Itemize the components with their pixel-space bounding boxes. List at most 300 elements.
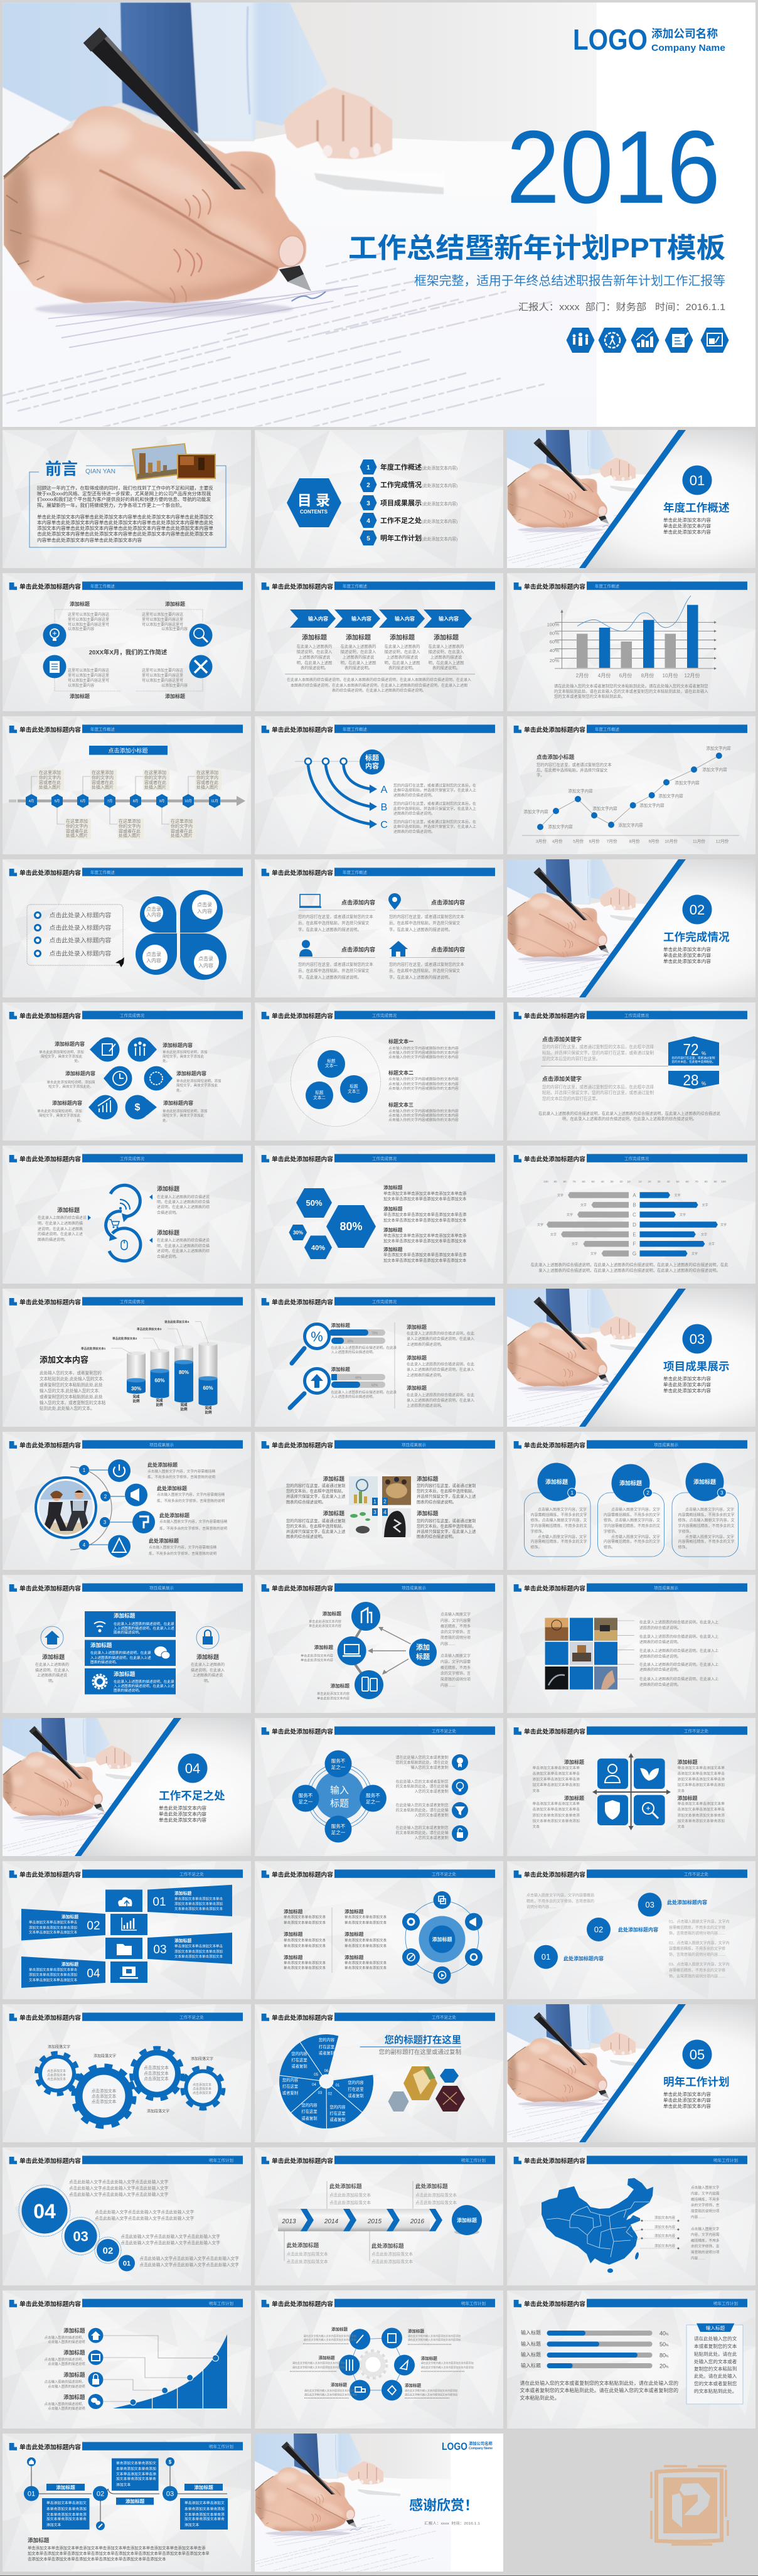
line chart: 7月份 bbox=[607, 839, 617, 844]
notes: 容或者在此 bbox=[39, 780, 61, 785]
left columns: 单击添加文本单击添加文本 bbox=[344, 1960, 387, 1965]
month nodes: 8月 bbox=[133, 799, 138, 803]
text right: 处。 bbox=[163, 1118, 169, 1123]
connectors bbox=[284, 2181, 413, 2261]
right text: 您的文本后，在此框中选择粘贴， bbox=[417, 1488, 476, 1494]
leader lines bbox=[617, 1621, 634, 1679]
mosaic bbox=[545, 1618, 617, 1690]
header: 年度工作概述 bbox=[90, 726, 115, 732]
line chart: 添加文字内容 bbox=[702, 767, 727, 772]
letter text: 您的内容打在这里，或者通过复制您的文本后，在 bbox=[393, 820, 476, 825]
card text: 内容需概括精炼，不用多余的文字 bbox=[678, 1513, 735, 1518]
block 2: 点击添加内容 bbox=[431, 899, 465, 906]
blue row 2: 图表的描述说明。 bbox=[90, 1660, 119, 1665]
blue row 1: 图表的描述说明。 bbox=[114, 1629, 142, 1634]
circles: 文本二 bbox=[313, 1095, 326, 1100]
petals: 入内容 bbox=[146, 911, 161, 918]
line chart: 添加文字内容 bbox=[675, 780, 700, 786]
text left: 简短文字，具体文字添加此 bbox=[39, 1113, 80, 1118]
block 4: 后，在此框中选择粘贴，并选择只保留文 bbox=[389, 968, 461, 973]
text blocks: 合描述说明。 bbox=[157, 1254, 179, 1259]
list: 点击此处录入标题内容 bbox=[49, 949, 111, 958]
text blocks: 明，在此录入上述图表的综合描 bbox=[157, 1199, 210, 1205]
panel: bar chart bbox=[507, 573, 755, 711]
notes: 你的文字内 bbox=[92, 775, 114, 780]
body box 1: 加文本单击添加文本单击 bbox=[46, 2516, 87, 2521]
number circles: 01 bbox=[123, 2260, 131, 2267]
card text: 内容需概括精炼，不用多余的文字 bbox=[531, 1539, 587, 1544]
text blocks: 添加标题 bbox=[157, 1229, 179, 1236]
stat 72%: 您的文本后，在此框中选择粘贴。 bbox=[672, 1060, 715, 1064]
list text: 此处添加标题 bbox=[149, 1538, 179, 1544]
column text: 描述说明，在此录入 bbox=[429, 649, 464, 654]
loop icons bbox=[109, 1199, 130, 1250]
logo: Company Name bbox=[469, 2447, 493, 2450]
right text: 图表的综合描述说明。 bbox=[417, 1533, 456, 1539]
bottom text: 点击此处添加段落文本 bbox=[287, 2258, 328, 2265]
right text: 饰，言简意赅的说明分项内容…… bbox=[669, 1931, 725, 1936]
header: 年度工作概述 bbox=[343, 869, 368, 875]
number circles bbox=[21, 2188, 135, 2271]
gear 1: 点击添加文本 bbox=[47, 2069, 66, 2073]
keyword 1: 您的内容打在这里，或者通过复制您的文本后，在此框中选择 bbox=[542, 1044, 654, 1049]
pie title: 您的副标题打在这里或通过复制 bbox=[379, 2049, 461, 2055]
panel: team photo with list bbox=[3, 1432, 251, 1570]
notes: 容或者在此 bbox=[196, 780, 218, 785]
right text: 内容，文字内容需 bbox=[691, 2232, 720, 2237]
left item: 描述说明，在此录入 bbox=[35, 1668, 69, 1673]
heading: 前言 bbox=[45, 459, 78, 478]
line chart: 5月份 bbox=[573, 839, 584, 844]
text right: 单击此处添加简短说明，添加 bbox=[163, 1108, 208, 1114]
bottom text: 点击此处添加段落文本 bbox=[287, 2251, 328, 2257]
mosaic text: 述图表的综合描述说明。 bbox=[639, 1626, 681, 1631]
column text: 表的描述说明。 bbox=[432, 665, 460, 670]
header: 年度工作概述 bbox=[595, 726, 620, 732]
text block: 内容单击此处添加文本内容单击此处添加文本内容 bbox=[37, 537, 142, 543]
satellites: 足之一 bbox=[331, 1764, 346, 1770]
left text: 单击此处添加文本内容 bbox=[301, 1657, 333, 1662]
right text: 的文本粘贴到此处。请在此处输 bbox=[396, 1808, 449, 1813]
text: 点击输入图表的描述说明， bbox=[45, 2402, 85, 2407]
text blocks: 可以添加主要内容这里可 bbox=[68, 678, 109, 683]
header: 单击此处添加标题内容 bbox=[19, 2014, 81, 2022]
side box: 输入标题 bbox=[706, 2325, 725, 2331]
gear labels: 添加段落文字 bbox=[48, 2044, 70, 2049]
value labels: 文字 bbox=[702, 1203, 708, 1208]
card text: 字修饰。 bbox=[604, 1529, 619, 1534]
card circles bbox=[537, 1462, 726, 1503]
card circles: 添加标题 bbox=[545, 1478, 568, 1485]
text: 单击添加文本单击添加文本单击添加文本单击添 bbox=[383, 1233, 467, 1238]
panel: curved arrows bbox=[255, 716, 503, 854]
text: 添加标题 bbox=[383, 1205, 403, 1211]
chevrons: 输入内容 bbox=[308, 615, 328, 621]
list: 点击此处录入标题内容 bbox=[49, 924, 111, 931]
cylinders: 完成 bbox=[132, 1394, 140, 1399]
top text: 此处添加标题 bbox=[415, 2182, 448, 2189]
band: 2015 bbox=[367, 2218, 382, 2225]
left text bbox=[40, 1355, 106, 1411]
text block bbox=[37, 485, 213, 543]
section number bbox=[178, 1754, 207, 1783]
top text: 此处添加标题 bbox=[329, 2182, 362, 2189]
pie: 或者复制 bbox=[329, 2117, 346, 2122]
right text: 02、点击输入图册文字内容，文字内 bbox=[669, 1941, 730, 1946]
left text: 单击添加文本单击添加文本单 bbox=[532, 1801, 580, 1806]
chart caption: 请在此处输入您的文本或者复制您的文本粘贴到此处。请在此处输入您的文本或者复制您 bbox=[554, 683, 708, 689]
right text: 内容…… bbox=[440, 1641, 456, 1646]
item text: 请在此文字框内输入文本内容添加文本内容添加 bbox=[304, 2334, 356, 2337]
card text: 内容需概括精炼，不用多余的文字 bbox=[604, 1539, 660, 1544]
letter text: 述图表的综合描述说明。 bbox=[393, 829, 435, 834]
panel: progress bars bbox=[507, 2290, 755, 2428]
notes: 你的文字内 bbox=[171, 824, 193, 829]
right text: 01、点击输入图册文字内容，文字内 bbox=[669, 1919, 730, 1924]
left text: 加文本单击添加文本单击添加 bbox=[532, 1783, 580, 1788]
text: 点击输入图表的描述说明， bbox=[45, 2357, 85, 2362]
panel: service shortfalls bbox=[255, 1718, 503, 1856]
center circle bbox=[315, 1771, 364, 1820]
cylinders: 80% bbox=[179, 1370, 189, 1375]
map bbox=[542, 2178, 653, 2273]
header bbox=[9, 2299, 243, 2308]
bottom text: 单击添加文本单击添加文本单击添加文本单击添加文本单击添加文本单击添加文本单击添加文本单击添 bbox=[28, 2545, 206, 2551]
scale: 100 bbox=[721, 1180, 726, 1183]
number circles: 03 bbox=[73, 2228, 88, 2245]
center caption: 20XX年X月，我们的工作简述 bbox=[89, 649, 168, 657]
satellites: 足之一 bbox=[366, 1798, 380, 1805]
right text: 文本 bbox=[678, 1824, 685, 1829]
mosaic text: 述图表的综合描述说明。 bbox=[639, 1667, 681, 1672]
header: 明年工作计划 bbox=[713, 2300, 738, 2306]
text blocks: 合描述说明。 bbox=[157, 1210, 179, 1215]
bar chart: 100% bbox=[547, 621, 559, 628]
header: 明年工作计划 bbox=[209, 2157, 233, 2163]
header: 工作不足之处 bbox=[684, 1871, 709, 1877]
block 4 bbox=[389, 941, 465, 980]
line chart: 添加文字内容 bbox=[658, 793, 683, 798]
block 03 text bbox=[153, 1938, 223, 1959]
value labels: 文字 bbox=[580, 1203, 587, 1208]
left columns: 单击添加文本单击添加文本 bbox=[344, 1920, 387, 1925]
item text: 请在此文字框内输入文本内容添加文本内容添加 bbox=[421, 2361, 474, 2364]
section text: 单击此处添加文本内容 bbox=[663, 1375, 711, 1382]
card outlines bbox=[525, 1493, 738, 1557]
left columns: 单击添加文本单击添加文本 bbox=[284, 1920, 326, 1925]
hexagons: 30% bbox=[293, 1230, 303, 1235]
item 4: 工作不足之处 bbox=[380, 516, 422, 525]
title boxes: 添加标题 bbox=[125, 2498, 145, 2504]
headings: 添加标题 bbox=[70, 601, 90, 607]
icon circles bbox=[108, 1459, 155, 1558]
item 3: 3 bbox=[366, 500, 370, 507]
right item: 明。 bbox=[204, 1679, 211, 1683]
section text bbox=[663, 1375, 711, 1393]
header bbox=[262, 2155, 495, 2165]
right text: 击添加文本单击添加文本单击 bbox=[678, 1771, 725, 1776]
month nodes bbox=[26, 794, 220, 808]
subtitle text bbox=[536, 753, 612, 778]
section title: 项目成果展示 bbox=[663, 1360, 730, 1373]
left columns: 单击添加文本单击添加文本 bbox=[284, 1965, 326, 1970]
notes: 处插入图片 bbox=[66, 832, 88, 839]
header: 单击此处添加标题内容 bbox=[272, 1298, 333, 1306]
left text: 添加文本单击添加文本单击添 bbox=[532, 1813, 580, 1818]
card text: 修饰。 bbox=[531, 1545, 542, 1550]
list text: 炼，不用多余的文字修饰，言简意赅的说明 bbox=[147, 1474, 215, 1479]
right text: 文本 bbox=[678, 1788, 685, 1793]
panel: circles in ring bbox=[255, 1002, 503, 1140]
card text: 点击输入图册文字内容，文字 bbox=[685, 1507, 734, 1512]
top-left text: 精炼，不用多余的文字修饰，言简意赅的 bbox=[526, 1899, 594, 1904]
panel: stepped circles bbox=[507, 1861, 755, 1999]
left text: 击添加文本单击添加文本单击 bbox=[532, 1771, 580, 1776]
month nodes: 10月 bbox=[184, 799, 192, 803]
text left: 添加标题内容 bbox=[65, 1070, 95, 1076]
right text: 饰，言简意赅的说明分项内容…… bbox=[669, 1973, 725, 1978]
summary: 录入上述图表的综合描述说明，在此录入上述图表的综合描述说明，在此录入上述图表的综合描述说明。 bbox=[538, 1267, 720, 1273]
right text: 单击添加文本单击添加文本单 bbox=[678, 1801, 725, 1806]
panel: three blue rows bbox=[3, 1575, 251, 1713]
panel: magnifiers bbox=[255, 1289, 503, 1427]
scale: 50 bbox=[591, 1180, 595, 1183]
body box 2: 本单击添加文本单击添加 bbox=[116, 2466, 156, 2471]
reporter: 汇报人：xxxx 时间：2016.1.1 bbox=[424, 2521, 480, 2526]
letters: B bbox=[381, 802, 387, 813]
progress bars: 输入标题 bbox=[521, 2363, 541, 2369]
magnifier 2: 入上述图表的综合描述说明。 bbox=[331, 1394, 376, 1399]
text: 加文本单击添加文本单击添加文本单击添加文本 bbox=[383, 1238, 467, 1243]
column headings: 添加标题 bbox=[302, 633, 327, 641]
headings: 添加标题 bbox=[165, 693, 185, 699]
steps: 此处添加标题内容 bbox=[563, 1955, 604, 1962]
text: 添加标题 bbox=[63, 2371, 85, 2378]
satellites: 服务不 bbox=[299, 1792, 313, 1798]
network nodes: 添加 bbox=[416, 1643, 430, 1651]
list text: 此处添加标题 bbox=[147, 1461, 178, 1468]
magnifier 1: 在此录入上述图表的综合描述说明。在此录 bbox=[331, 1345, 397, 1350]
ring bbox=[405, 1901, 479, 1975]
magnifier 2: 46% bbox=[355, 1376, 362, 1380]
top text: 点击此处添加段落文本 bbox=[415, 2199, 457, 2206]
right text: 简意赅的说明分项 bbox=[440, 1635, 471, 1640]
bar chart: 60% bbox=[550, 639, 559, 645]
column text: 上述图表的描述说 bbox=[343, 654, 375, 660]
block 01 text: 单击添加文本单击添加文本单击 bbox=[174, 1896, 223, 1901]
block 01 text: 添加标题 bbox=[174, 1891, 191, 1896]
card text: 点击输入图册文字内容，文字 bbox=[538, 1507, 587, 1512]
section text: 单击此处添加文本内容 bbox=[663, 1387, 711, 1393]
pie: 或者复制 bbox=[301, 2115, 318, 2121]
progress bars: 80% bbox=[659, 2353, 669, 2359]
rings bbox=[307, 1764, 372, 1829]
text: 加文本单击添加文本单击添加文本单击添加文本 bbox=[383, 1196, 467, 1201]
right text bbox=[388, 1038, 459, 1122]
number tags: 4 bbox=[383, 1510, 387, 1515]
block 2: 您的内容打在这里，或者通过复制您的文本 bbox=[389, 914, 464, 919]
center circle: 输入 bbox=[330, 1785, 349, 1796]
text left bbox=[37, 1041, 95, 1123]
letter text: 此框中选择粘贴，并选择只保留文字。在此录入上 bbox=[393, 824, 476, 829]
mosaic text: 在此录入上述图表的综合描述说明，在此录入上 bbox=[639, 1619, 718, 1624]
value labels: 文字 bbox=[572, 1242, 578, 1247]
notes: 容或者在此 bbox=[171, 829, 193, 834]
right text: 简意赅的说明分项 bbox=[691, 2250, 720, 2255]
header bbox=[262, 581, 495, 591]
header: 明年工作计划 bbox=[713, 2157, 738, 2163]
left columns: 添加标题 bbox=[344, 1931, 364, 1937]
left text: 或者复制您的文本粘贴到此处,此处 bbox=[40, 1393, 103, 1400]
letter text: 此框中选择粘贴，并选择只保留文字。在此录入上 bbox=[393, 788, 476, 793]
section text: 单击此处添加文本内容 bbox=[663, 946, 711, 952]
title circle: 内容 bbox=[365, 761, 379, 770]
left text: 单击此处添加文本内容 bbox=[309, 1619, 341, 1624]
panel: work summary bbox=[3, 573, 251, 711]
panel: section 04 bbox=[3, 1718, 251, 1857]
logo: 添加公司名称 bbox=[651, 28, 718, 40]
blue row 1: 添加标题 bbox=[114, 1612, 136, 1619]
left columns: 单击添加文本单击添加文本 bbox=[284, 1914, 326, 1919]
text bbox=[383, 1184, 467, 1263]
section text: 单击此处添加文本内容 bbox=[663, 2103, 711, 2109]
header: 工作不足之处 bbox=[432, 1728, 457, 1734]
header bbox=[514, 1726, 747, 1736]
column text: 明，在此录入上述图 bbox=[429, 660, 464, 665]
progress bars: 40% bbox=[659, 2330, 669, 2336]
callouts bbox=[81, 1319, 208, 1354]
letter text bbox=[393, 783, 476, 834]
progress bars bbox=[521, 2329, 669, 2369]
panel: cylinders bbox=[3, 1289, 251, 1427]
panel: four quadrants bbox=[507, 1718, 755, 1856]
callouts: 单击此处添加文本1 bbox=[81, 1346, 106, 1351]
text left: 单击此处添加简短说明，添加 bbox=[37, 1108, 82, 1114]
right text: 添加标题 bbox=[678, 1759, 698, 1765]
item text: 请在此文字框内输入文本内容添加文本内容添加 bbox=[405, 2388, 457, 2392]
watermark stamp bbox=[651, 2466, 728, 2545]
right text: 在此处输入您的文本或者复制您 bbox=[396, 1803, 449, 1808]
header: 单击此处添加标题内容 bbox=[19, 1870, 81, 1879]
right text: 概括精炼，不用多 bbox=[440, 1665, 471, 1670]
line chart: 9月份 bbox=[649, 839, 659, 844]
magnifier 2 bbox=[290, 1366, 397, 1408]
gear 2: 点击添加文本 bbox=[92, 2099, 117, 2104]
header: 项目成果展示 bbox=[654, 1585, 679, 1591]
title circle: 标题 bbox=[365, 753, 379, 762]
right text: 内容…… bbox=[440, 1683, 456, 1688]
left text: 文本粘贴到此处,此处输入您的文本, bbox=[40, 1376, 104, 1382]
item text: 请在此文字框内输入文本内容添加文本内容添加 bbox=[292, 2365, 345, 2369]
body box 3: 加文本单击添加文本单击 bbox=[184, 2516, 225, 2521]
line chart: 6月份 bbox=[589, 839, 600, 844]
text blocks bbox=[68, 612, 188, 688]
network nodes: 标题 bbox=[416, 1652, 430, 1661]
header: 单击此处添加标题内容 bbox=[19, 2157, 81, 2165]
top text: 点击此处添加段落文本 bbox=[329, 2192, 371, 2198]
numbered nodes bbox=[79, 1465, 132, 1550]
column text: 描述说明，在此录入 bbox=[341, 649, 376, 654]
text blocks: 添加标题 bbox=[57, 1206, 80, 1213]
block 02 text: 添加标题 bbox=[61, 1914, 78, 1919]
left text: 文本 bbox=[532, 1788, 540, 1793]
reporter line: 汇报人：xxxx 部门：财务部 时间：2016.1.1 bbox=[518, 302, 725, 313]
month nodes: 4月 bbox=[29, 799, 34, 803]
header: 工作不足之处 bbox=[684, 1728, 709, 1734]
center circle: 标题 bbox=[330, 1798, 349, 1809]
photos bbox=[132, 443, 216, 480]
left text: 添加标题 bbox=[564, 1759, 584, 1765]
right text: 简意赅的说明分项 bbox=[440, 1677, 471, 1682]
text right: 单击此处添加简短说明，添加 bbox=[176, 1078, 222, 1083]
block 4: 点击添加内容 bbox=[431, 946, 465, 953]
text right: 处。 bbox=[163, 1058, 169, 1063]
item text: 添加标题 bbox=[331, 2326, 348, 2332]
dashed arcs bbox=[19, 2185, 121, 2263]
bar chart: 4月份 bbox=[598, 672, 611, 679]
block 03 text: 单击添加文本单击添加文本单击 bbox=[174, 1943, 223, 1948]
right text: 入您的文本或者复制 bbox=[415, 1789, 449, 1794]
section text: 单击此处添加文本内容 bbox=[159, 1805, 206, 1811]
text blocks: 在此录入上述图表的综合描述说 bbox=[157, 1238, 210, 1243]
petals: 点击录 bbox=[146, 951, 161, 957]
text: 单击添加文本单击添加文本单击添加文本单击添 bbox=[383, 1211, 467, 1217]
band: 2016 bbox=[410, 2218, 425, 2225]
blue row 1: 入上述图表的描述说明，在此录入上述 bbox=[114, 1626, 174, 1631]
chart caption bbox=[554, 683, 708, 699]
right text: 饰，言简意赅的说明分项内容…… bbox=[669, 1952, 725, 1957]
left text: 添加文本单击添加文本单击添 bbox=[532, 1777, 580, 1782]
pie: 04 bbox=[312, 2083, 316, 2087]
header bbox=[514, 1869, 747, 1879]
left text: 单击此处添加文本内容 bbox=[317, 1696, 350, 1701]
text left: 添加标题内容 bbox=[55, 1041, 85, 1047]
panel: butterfly bar chart bbox=[507, 1146, 755, 1284]
section text: 单击此处添加文本内容 bbox=[663, 522, 711, 529]
header: 单击此处添加标题内容 bbox=[19, 726, 81, 734]
satellites: 足之一 bbox=[299, 1798, 313, 1805]
right item: 在此录入上述图表的 bbox=[191, 1662, 225, 1667]
top-left text: 说明分项内容…… bbox=[526, 1904, 557, 1909]
loop arrows bbox=[106, 1185, 141, 1261]
letter text: 您的内容打在这里，或者通过复制您的文本后，在 bbox=[393, 783, 476, 788]
panel: staggered blocks bbox=[3, 1861, 251, 1999]
magnifier 2: 62% bbox=[371, 1383, 378, 1387]
logo: LOGO bbox=[573, 23, 648, 56]
header bbox=[262, 1440, 495, 1449]
header: 单击此处添加标题内容 bbox=[524, 1584, 585, 1592]
letter text: 述图表的综合描述说明。 bbox=[393, 793, 435, 798]
number tags: 2 bbox=[383, 1499, 387, 1505]
list text: 点击输入图册文字内容，文字内容需概括精 bbox=[157, 1492, 225, 1497]
keyword 1: 您的文本后您的内容打在这里。 bbox=[542, 1056, 600, 1061]
card text: 修饰。点击输入图册文字内容，文 bbox=[604, 1518, 660, 1523]
list text bbox=[69, 2179, 239, 2267]
letters: C bbox=[380, 820, 388, 830]
right text: 您的文本粘贴到此处。请在此处 bbox=[396, 1760, 449, 1765]
ring bbox=[291, 1037, 380, 1126]
map labels: 添加文本内容 bbox=[654, 2224, 676, 2230]
left text: 单击此处添加文本内容 bbox=[317, 1691, 350, 1696]
panel: thank you bbox=[255, 2434, 503, 2572]
right text: 入您的文本或者复制 bbox=[415, 1835, 449, 1840]
subtitle box bbox=[89, 746, 168, 755]
header: 单击此处添加标题内容 bbox=[19, 2300, 81, 2308]
blue row 2: 在此录入上述图表的描述说明，在此录 bbox=[90, 1650, 151, 1655]
list text: 此处添加标题 bbox=[159, 1512, 190, 1518]
value labels: 文字 bbox=[590, 1252, 597, 1256]
left text: 贴到此处,此处输入您的文本。 bbox=[40, 1405, 95, 1411]
